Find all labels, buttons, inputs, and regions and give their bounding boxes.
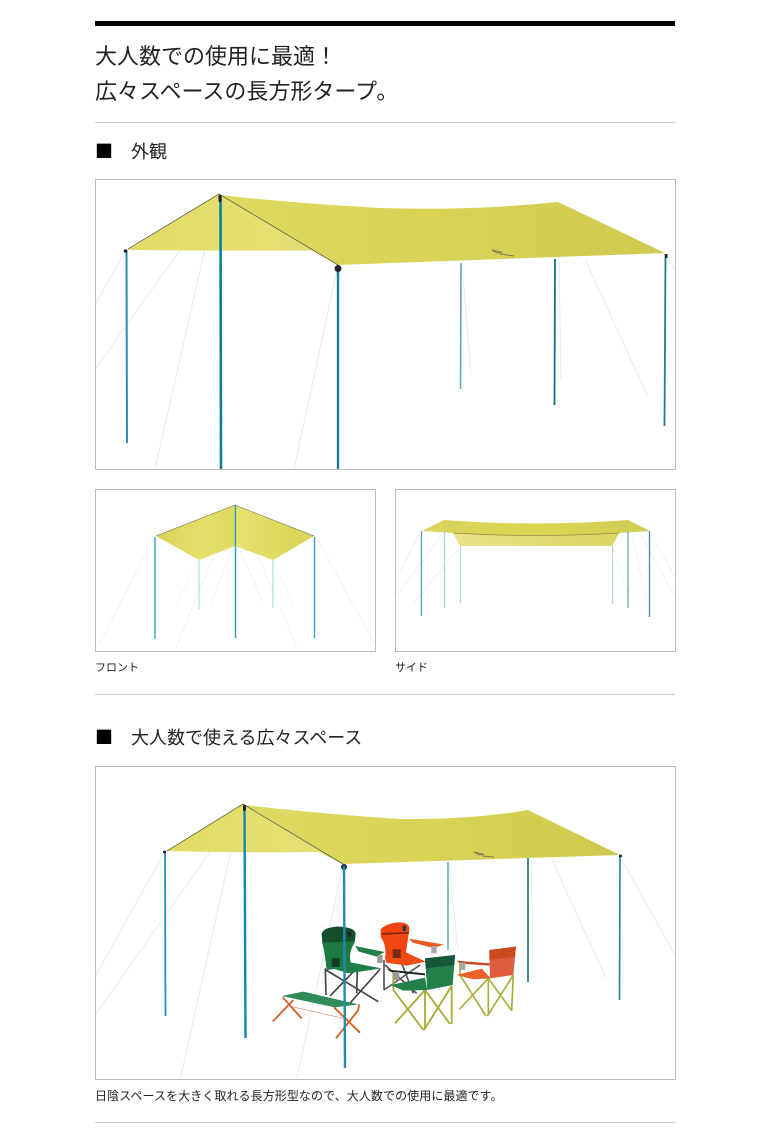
upper tarp panel — [422, 520, 650, 536]
guy lines — [96, 510, 375, 650]
guy lines — [96, 808, 675, 1078]
poles — [165, 806, 620, 1038]
poles — [155, 505, 314, 639]
chair: green back — [322, 927, 385, 1005]
top rule — [95, 21, 675, 26]
front pole over chairs — [344, 866, 345, 1068]
panel: front view — [96, 490, 376, 652]
title: 広々スペースの長方形タープ。 — [95, 79, 398, 104]
heading: spacious area: 大人数で使える広々スペース — [131, 728, 362, 748]
heading: spacious area: ■ — [95, 724, 113, 750]
poles — [422, 531, 650, 617]
panel: tarp with chairs — [96, 766, 676, 1080]
chairs and bench — [273, 922, 516, 1038]
caption: side: サイド — [395, 661, 428, 674]
panel: main view of tarp — [96, 180, 676, 470]
heading: 外観: ■ — [95, 138, 113, 164]
tarp — [156, 505, 314, 560]
heading: 外観: 外観 — [131, 142, 167, 162]
caption: body text: 日陰スペースを大きく取れる長方形型なので、大人数での使用に最適です。 — [95, 1088, 503, 1103]
heading: spacious area — [95, 724, 362, 750]
caption: front: フロント — [95, 662, 139, 674]
heading: 外観 — [95, 138, 167, 164]
guy lines — [396, 533, 675, 605]
chair: orange back — [381, 922, 444, 993]
chair: green front — [386, 955, 455, 1030]
title: 大人数での使用に最適！ — [95, 44, 337, 69]
tarp — [167, 804, 620, 864]
panel: side view — [396, 490, 676, 652]
poles — [126, 196, 666, 469]
guy lines — [96, 198, 675, 469]
tarp — [128, 194, 665, 265]
chair: orange front — [457, 947, 516, 1016]
pole caps — [163, 805, 622, 870]
lower tarp panel — [453, 533, 619, 546]
title — [95, 44, 398, 104]
pole caps — [124, 195, 667, 272]
bench — [273, 992, 360, 1038]
